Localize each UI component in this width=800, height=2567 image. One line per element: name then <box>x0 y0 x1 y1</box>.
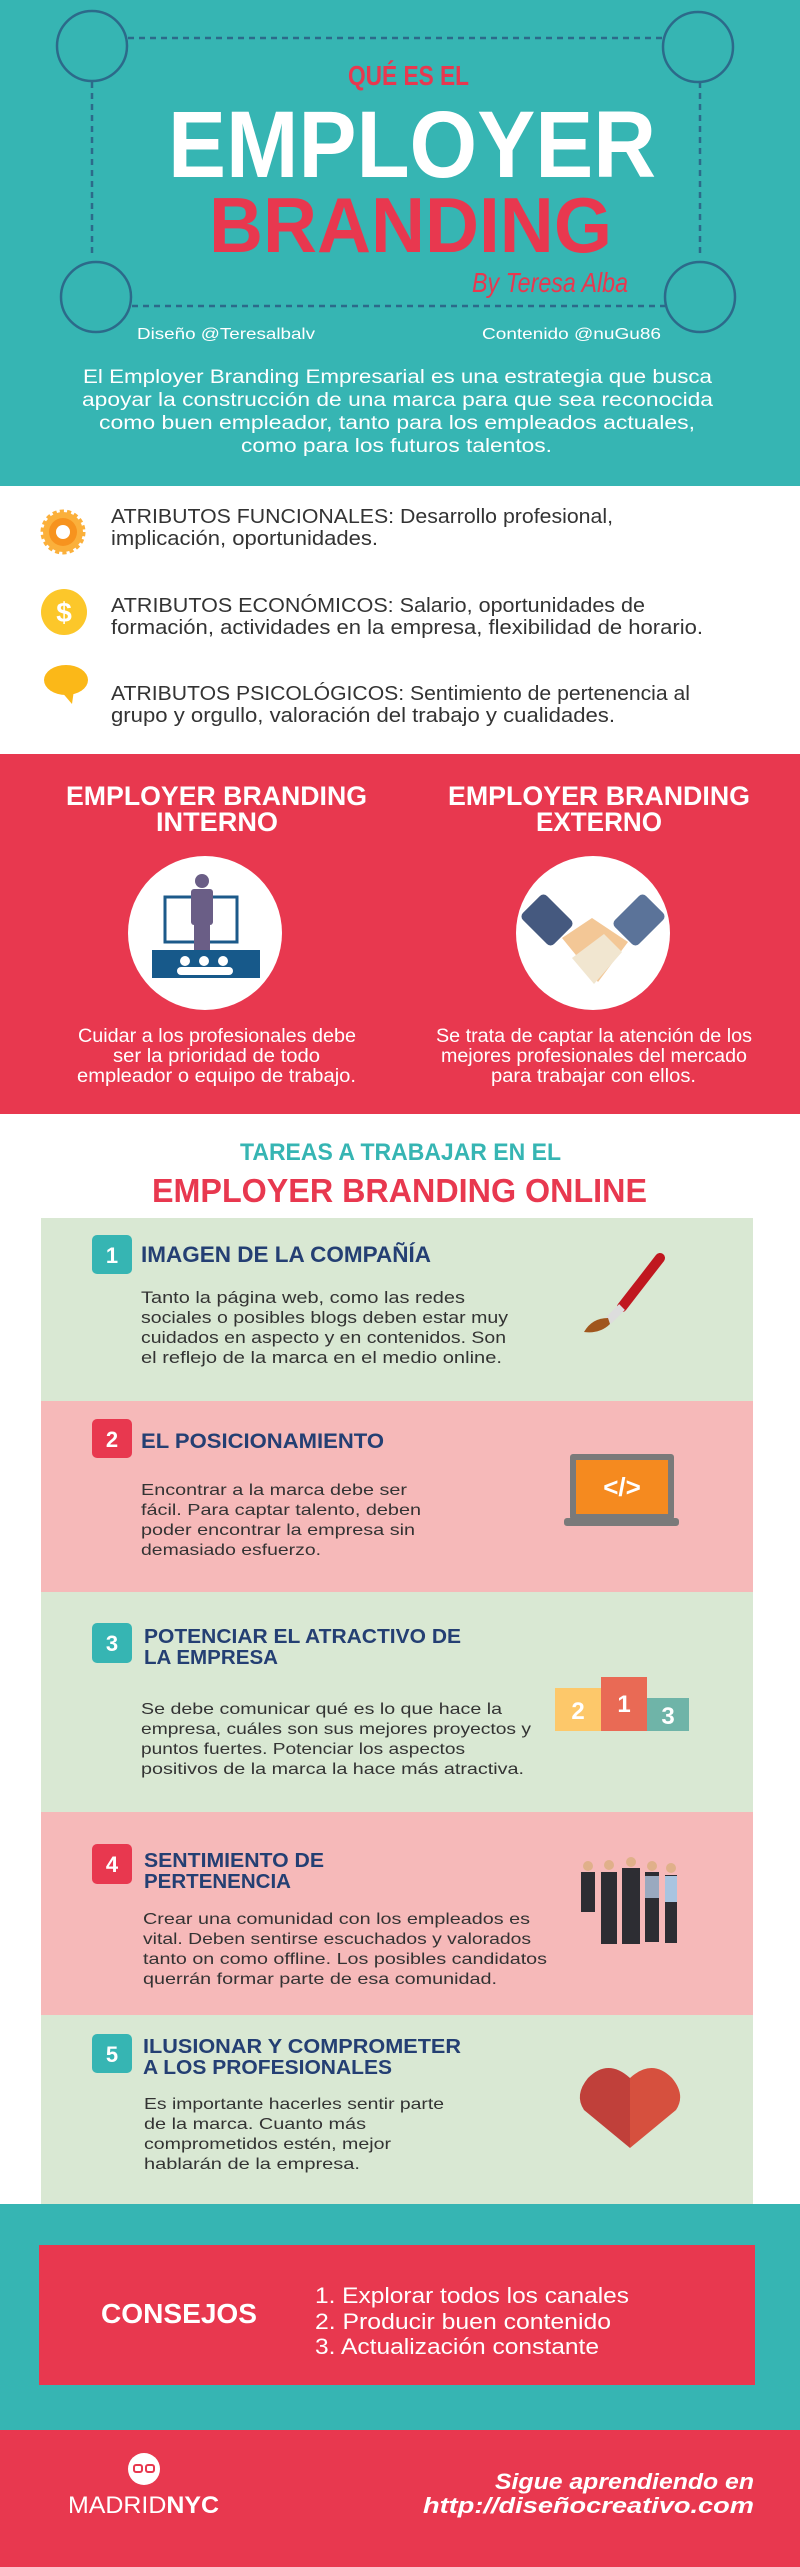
icon: podium: 1 <box>617 1691 631 1718</box>
panel: task 1: el reflejo de la marca en el medio online. <box>141 1348 502 1367</box>
panel: task 5: A LOS PROFESIONALES <box>143 2057 392 2079</box>
panel: task 2 <box>41 1401 753 1592</box>
intro text: El Employer Branding Empresarial es una estrategia que busca <box>83 367 713 388</box>
logo <box>68 2453 219 2519</box>
text: psicologicos: grupo y orgullo, valoración del trabajo y cualidades. <box>111 705 615 727</box>
panel: task 5: de la marca. Cuanto más <box>144 2116 366 2133</box>
call to action: Sigue aprendiendo en <box>495 2469 754 2494</box>
panel: task 1: 1 <box>106 1243 118 1268</box>
heading: interno: INTERNO <box>156 807 278 837</box>
panel: task 3: empresa, cuáles son sus mejores proyectos y <box>141 1721 531 1738</box>
panel: task 5: comprometidos estén, mejor <box>144 2136 392 2153</box>
panel: attributes <box>41 506 703 727</box>
heading: externo <box>448 781 750 837</box>
icon: gear <box>43 512 83 552</box>
panel: task 4: tanto on como offline. Los posibles candidatos <box>143 1951 547 1968</box>
panel: consejos: 3. Actualización constante <box>315 2334 599 2359</box>
text: economicos <box>111 594 703 639</box>
heading: interno <box>66 781 367 837</box>
icon: podium: 3 <box>661 1703 675 1730</box>
text: funcionales: implicación, oportunidades. <box>111 528 378 550</box>
logo: MADRIDNYC <box>68 2492 219 2519</box>
intro text <box>82 367 714 457</box>
icon: heart <box>580 2068 680 2148</box>
credits: Contenido @nuGu86 <box>482 326 661 343</box>
heading: externo: EMPLOYER BRANDING <box>448 781 750 811</box>
panel: task 3: 3 <box>106 1631 118 1656</box>
text: psicologicos: ATRIBUTOS PSICOLÓGICOS: Sentimiento de pertenencia al <box>111 682 690 705</box>
text: externo: Se trata de captar la atención de los <box>436 1026 752 1047</box>
heading: tareas: TAREAS A TRABAJAR EN EL <box>240 1139 561 1166</box>
heading: employer branding online: EMPLOYER BRANDING ONLINE <box>152 1172 647 1209</box>
title: employer: EMPLOYER <box>168 92 656 198</box>
icon: people <box>581 1857 677 1944</box>
panel: task 4 <box>41 1812 753 2015</box>
text: funcionales <box>111 506 613 550</box>
icon: podium <box>555 1677 689 1731</box>
panel: task 4: SENTIMIENTO DE <box>144 1850 324 1872</box>
panel: consejos: 2. Producir buen contenido <box>315 2309 611 2334</box>
text: interno: ser la prioridad de todo <box>113 1046 320 1067</box>
intro text: apoyar la construcción de una marca para que sea reconocida <box>82 390 714 411</box>
text: externo: para trabajar con ellos. <box>491 1066 696 1087</box>
panel: task 5 <box>41 2015 753 2204</box>
panel: task 5: ILUSIONAR Y COMPROMETER <box>143 2036 462 2058</box>
text: psicologicos <box>111 682 690 727</box>
panel: task 3: POTENCIAR EL ATRACTIVO DE <box>144 1626 461 1648</box>
panel: consejos <box>0 2204 800 2430</box>
icon: dollar <box>41 589 87 635</box>
credits: Diseño @Teresalbalv <box>137 326 315 343</box>
icon: laptop <box>564 1454 679 1526</box>
header panel <box>0 0 800 486</box>
text: externo <box>436 1026 752 1087</box>
panel: task 2: fácil. Para captar talento, deben <box>141 1502 421 1519</box>
heading: externo: EXTERNO <box>536 807 662 837</box>
panel: interno / externo <box>0 754 800 1114</box>
panel: task 5: 5 <box>106 2042 118 2067</box>
panel: task 1: cuidados en aspecto y en contenidos. Son <box>141 1328 506 1347</box>
panel: task 3: Se debe comunicar qué es lo que hace la <box>141 1701 502 1718</box>
panel: consejos: 1. Explorar todos los canales <box>315 2283 629 2308</box>
panel: task 2: 2 <box>106 1427 118 1452</box>
signature: By Teresa Alba <box>472 267 628 298</box>
panel: task 1: sociales o posibles blogs deben estar muy <box>141 1308 509 1327</box>
text: funcionales: ATRIBUTOS FUNCIONALES: Desarrollo profesional, <box>111 506 613 528</box>
icon: brush <box>584 1258 660 1332</box>
panel: task 2: demasiado esfuerzo. <box>141 1542 321 1559</box>
panel: task 1: IMAGEN DE LA COMPAÑÍA <box>141 1242 431 1267</box>
call to action: http://diseñocreativo.com <box>423 2493 754 2518</box>
panel: task 4: 4 <box>106 1852 119 1877</box>
icon: laptop: </> <box>603 1472 641 1502</box>
text: interno: empleador o equipo de trabajo. <box>77 1066 356 1087</box>
text: economicos: formación, actividades en la empresa, flexibilidad de horario. <box>111 617 703 639</box>
panel: task 1 <box>41 1218 753 1401</box>
panel: task 5: Es importante hacerles sentir parte <box>144 2096 444 2113</box>
panel: task 4: querrán formar parte de esa comunidad. <box>143 1971 497 1988</box>
panel: consejos: CONSEJOS <box>101 2298 257 2329</box>
icon: dollar: $ <box>56 597 72 628</box>
panel: task 2: Encontrar a la marca debe ser <box>141 1482 408 1499</box>
intro text: como para los futuros talentos. <box>241 436 552 457</box>
panel: task 3: puntos fuertes. Potenciar los aspectos <box>141 1741 465 1758</box>
panel: task 3: LA EMPRESA <box>144 1647 278 1669</box>
icon: podium: 2 <box>571 1698 585 1725</box>
text: interno: Cuidar a los profesionales debe <box>78 1026 356 1047</box>
text: interno <box>77 1026 356 1087</box>
intro text: como buen empleador, tanto para los empleados actuales, <box>99 413 695 434</box>
text: economicos: ATRIBUTOS ECONÓMICOS: Salario, oportunidades de <box>111 594 645 617</box>
panel: task 2: poder encontrar la empresa sin <box>141 1522 415 1539</box>
panel: task 4: Crear una comunidad con los empleados es <box>143 1911 530 1928</box>
panel: task 3 <box>41 1592 753 1812</box>
heading: interno: EMPLOYER BRANDING <box>66 781 367 811</box>
icon: presenter <box>128 856 282 1010</box>
footer <box>0 2430 800 2567</box>
call to action <box>423 2469 754 2518</box>
panel: task 4: vital. Deben sentirse escuchados y valorados <box>143 1931 531 1948</box>
panel: task 2: EL POSICIONAMIENTO <box>141 1430 384 1453</box>
panel: task 3: positivos de la marca la hace más atractiva. <box>141 1761 524 1778</box>
panel: task 4: PERTENENCIA <box>144 1871 291 1893</box>
heading: qué es el: QUÉ ES EL <box>348 60 469 91</box>
title: branding: BRANDING <box>209 181 612 269</box>
icon: handshake <box>516 856 670 1010</box>
credits <box>137 326 661 343</box>
text: externo: mejores profesionales del mercado <box>441 1046 747 1067</box>
panel: task 5: hablarán de la empresa. <box>144 2156 360 2173</box>
icon: brain <box>44 665 88 704</box>
panel: task 1: Tanto la página web, como las redes <box>141 1288 465 1307</box>
